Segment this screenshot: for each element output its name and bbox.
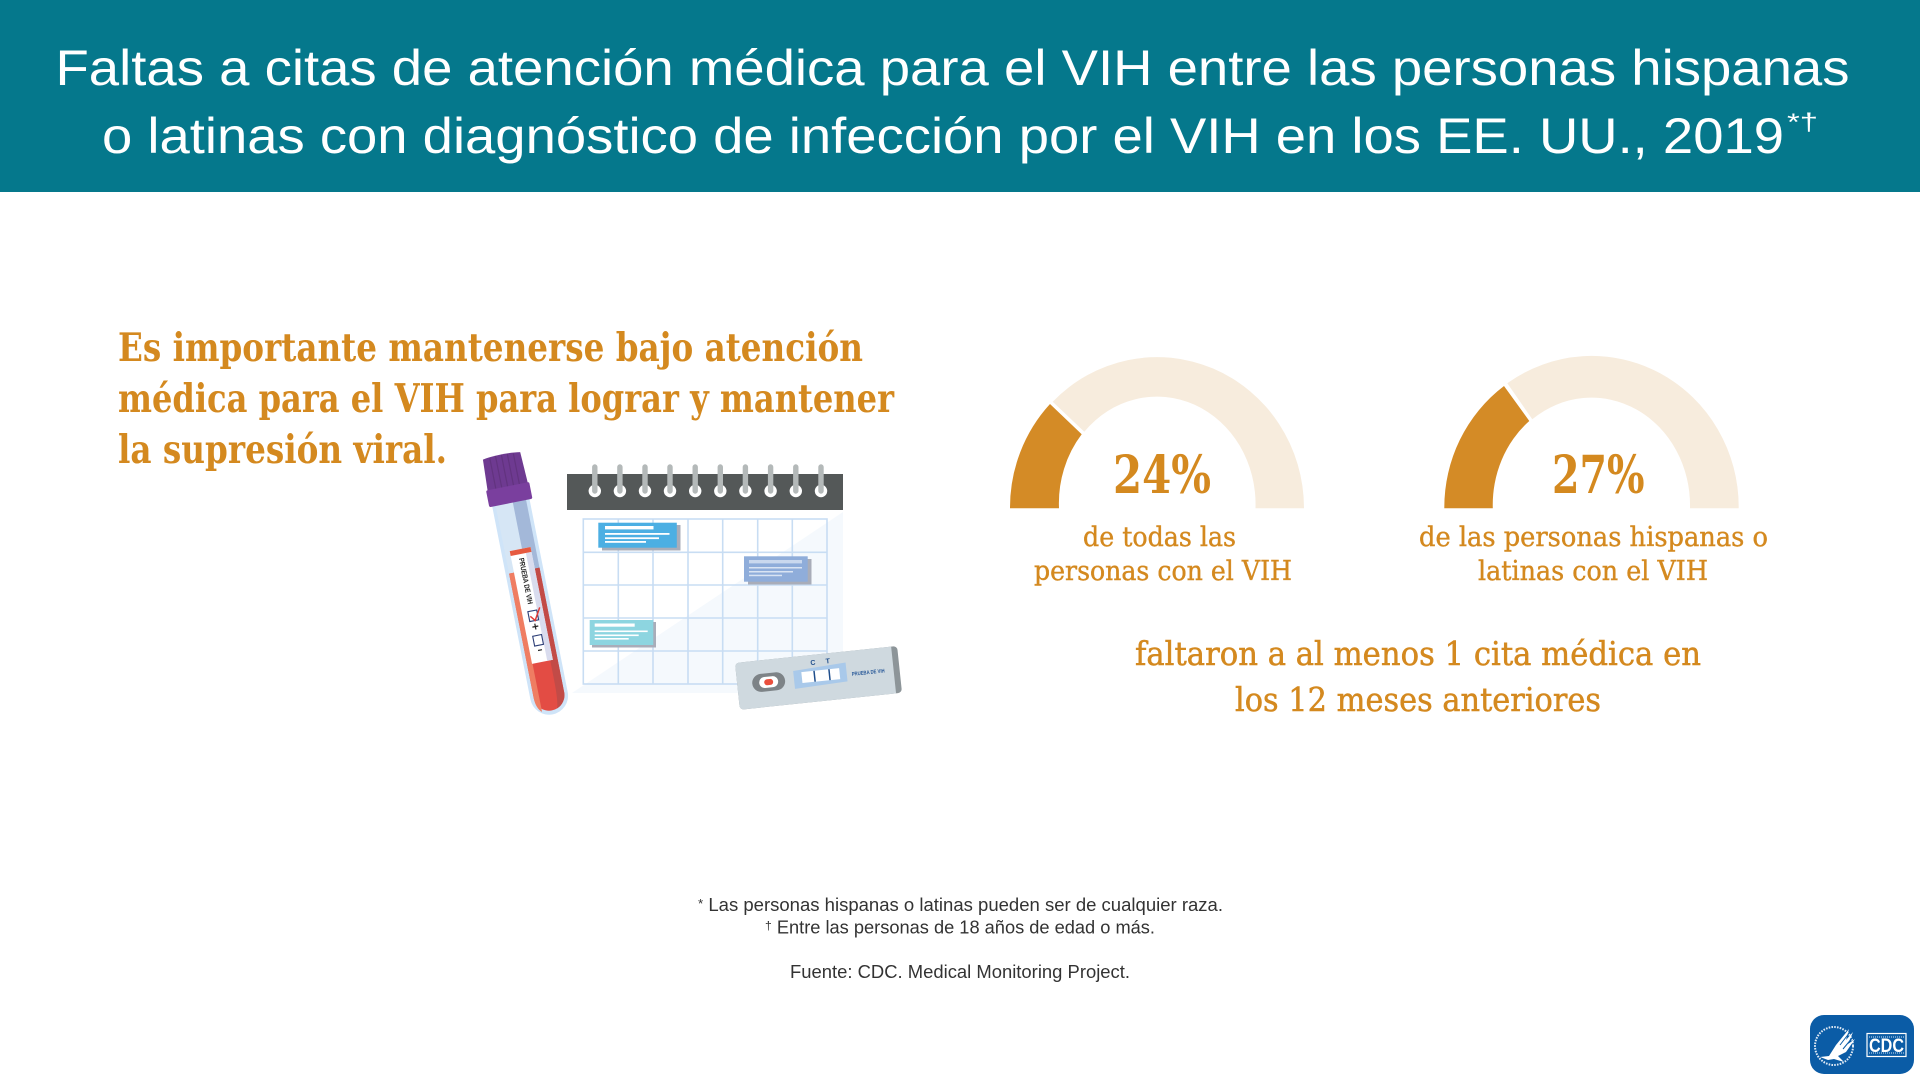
key message text: Es importante mantenerse bajo atención: [118, 325, 863, 371]
illustration: blood test tube: [480, 450, 574, 719]
header banner: [0, 0, 1920, 192]
key message text: médica para el VIH para lograr y mantener: [118, 376, 894, 422]
gauge: 24% of all people with HIV: de todas las: [1083, 522, 1236, 553]
gauge caption: faltaron a al menos 1 cita médica en: [1135, 634, 1701, 673]
footnotes and source: †: [765, 918, 772, 932]
footnotes and source: Entre las personas de 18 años de edad o más.: [772, 918, 1155, 938]
illustration: rapid test cassette: PRUEBA DE VIH: [852, 668, 885, 678]
calendar grid: [583, 519, 827, 684]
label: PRUEBA DE VIH: [517, 557, 535, 605]
footnotes and source: Las personas hispanas o latinas pueden ser de cualquier raza.: [703, 895, 1223, 915]
illustration: rapid test cassette: [735, 646, 902, 710]
appointment card: teal: [590, 620, 656, 648]
gauge caption: los 12 meses anteriores: [1235, 680, 1601, 719]
footnotes and source: [698, 895, 1223, 982]
label: [510, 547, 553, 664]
CDC mark: CDC: [1869, 1036, 1904, 1057]
key message text: la supresión viral.: [118, 427, 447, 473]
gauge: 27% of Hispanic or Latino people with HIV: 27%: [1552, 445, 1644, 506]
gauge: 24% of all people with HIV: 24%: [1113, 445, 1211, 506]
title: *†: [1787, 109, 1818, 136]
gauge: 27% of Hispanic or Latino people with HIV: de las personas hispanas o: [1419, 522, 1768, 553]
appointment card: blue: [598, 523, 680, 550]
key message text: [118, 325, 894, 473]
gauge: 27% of Hispanic or Latino people with HIV: [1419, 356, 1768, 587]
gauge: 24% of all people with HIV: [1010, 357, 1304, 587]
illustration: rapid test cassette: C: [810, 660, 816, 667]
cap: [480, 450, 532, 507]
gauge: 27% of Hispanic or Latino people with HIV: latinas con el VIH: [1478, 556, 1708, 587]
footnotes and source: *: [698, 896, 703, 911]
logo: HHS and CDC: [1810, 1015, 1914, 1074]
calendar header bar: [567, 467, 843, 510]
footnotes and source: Fuente: CDC. Medical Monitoring Project.: [790, 962, 1130, 982]
gauge caption: [1135, 634, 1701, 719]
title: o latinas con diagnóstico de infección por el VIH en los EE. UU., 2019: [102, 108, 1784, 164]
appointment card: periwinkle: [744, 556, 812, 584]
icon: HHS eagle emblem: [1815, 1027, 1855, 1065]
title: [56, 40, 1850, 164]
illustration: rapid test cassette: T: [825, 658, 831, 665]
illustration: calendar: [567, 467, 843, 693]
gauge: 24% of all people with HIV: personas con el VIH: [1034, 556, 1292, 587]
title: Faltas a citas de atención médica para el VIH entre las personas hispanas: [56, 40, 1850, 96]
